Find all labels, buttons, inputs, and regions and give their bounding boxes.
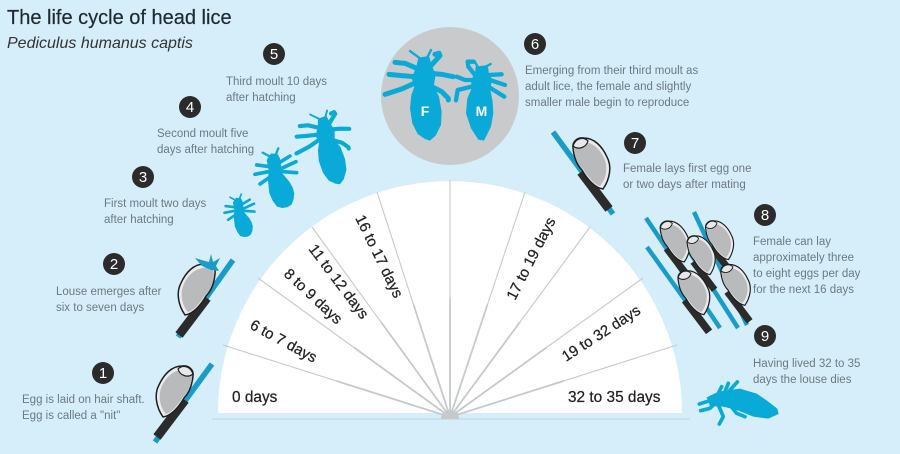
step 2 number xyxy=(103,253,125,275)
step 6 caption xyxy=(525,65,698,109)
step 5 caption: Third moult 10 days xyxy=(226,76,327,88)
step 5: third moult nymph xyxy=(290,107,359,191)
step 4 number: 4 xyxy=(186,99,194,116)
label: 11 to 12 days: 11 to 12 days xyxy=(305,241,372,322)
step 4 caption xyxy=(157,128,254,156)
step 7 caption: Female lays first egg one xyxy=(623,163,751,175)
step 5 number xyxy=(263,43,285,65)
step 5 number: 5 xyxy=(270,46,278,63)
label: 32 to 35 days: 32 to 35 days xyxy=(568,389,661,406)
step 1 caption: Egg is laid on hair shaft. xyxy=(22,394,145,406)
step 1: egg on hair shaft xyxy=(155,364,212,442)
step 6 caption: Emerging from their third moult as xyxy=(525,65,698,77)
step 8 caption: for the next 16 days xyxy=(753,284,854,296)
step 7: first egg xyxy=(553,132,613,214)
step 9: dead louse xyxy=(699,382,779,424)
male louse: M xyxy=(476,103,487,119)
step 8 caption xyxy=(753,236,861,296)
subtitle: Pediculus humanus captis xyxy=(7,35,193,52)
step 9 number xyxy=(754,325,776,347)
step 1 number xyxy=(92,362,114,384)
step 7 number: 7 xyxy=(631,135,639,152)
step 8 caption: approximately three xyxy=(753,252,854,264)
step 1 caption: Egg is called a "nit" xyxy=(22,410,120,422)
step 4 caption: Second moult five xyxy=(157,128,248,140)
step 8: cluster of eggs xyxy=(646,212,750,332)
label: 17 to 19 days: 17 to 19 days xyxy=(503,215,559,303)
step 2 caption: six to seven days xyxy=(56,302,144,314)
label: 8 to 9 days: 8 to 9 days xyxy=(280,265,346,328)
step 9 caption xyxy=(753,358,860,386)
step 2 number: 2 xyxy=(110,256,118,273)
step 3: first moult nymph xyxy=(224,194,254,237)
step 3 number xyxy=(132,166,154,188)
step 3 number: 3 xyxy=(139,169,147,186)
female louse: F xyxy=(421,103,430,119)
step 9 number: 9 xyxy=(761,328,769,345)
step 8 number xyxy=(754,204,776,226)
step 6 number xyxy=(524,33,546,55)
step 4 caption: days after hatching xyxy=(157,144,254,156)
label: 6 to 7 days: 6 to 7 days xyxy=(247,317,320,367)
step 7 caption: or two days after mating xyxy=(623,179,746,191)
step 6: adult lice circle xyxy=(381,27,519,165)
step 3 caption xyxy=(104,198,206,226)
step 4: second moult nymph xyxy=(255,148,297,208)
step 9 caption: days the louse dies xyxy=(753,374,852,386)
title: The life cycle of head lice xyxy=(7,7,232,29)
step 6 caption: smaller male begin to reproduce xyxy=(525,97,689,109)
step 7 number xyxy=(624,132,646,154)
label: 19 to 32 days: 19 to 32 days xyxy=(559,302,644,365)
step 4 number xyxy=(179,96,201,118)
step 8 number: 8 xyxy=(761,207,769,224)
step 2 caption: Louse emerges after xyxy=(56,286,162,298)
step 1 caption xyxy=(22,394,145,422)
step 5 caption xyxy=(226,76,327,104)
step 2 caption xyxy=(56,286,162,314)
step 3 caption: First moult two days xyxy=(104,198,206,210)
label: 0 days: 0 days xyxy=(232,389,278,406)
label: 16 to 17 days: 16 to 17 days xyxy=(351,212,406,301)
step 3 caption: after hatching xyxy=(104,214,174,226)
semicircular timeline fan xyxy=(212,180,690,419)
step 6 caption: adult lice, the female and slightly xyxy=(525,81,691,93)
step 9 caption: Having lived 32 to 35 xyxy=(753,358,860,370)
step 7 caption xyxy=(623,163,751,191)
step 5 caption: after hatching xyxy=(226,92,296,104)
step 8 caption: Female can lay xyxy=(753,236,831,248)
step 6 number: 6 xyxy=(531,36,539,53)
step 1 number: 1 xyxy=(99,365,107,382)
step 2: louse emerging from egg xyxy=(178,254,233,337)
step 8 caption: to eight eggs per day xyxy=(753,268,861,280)
